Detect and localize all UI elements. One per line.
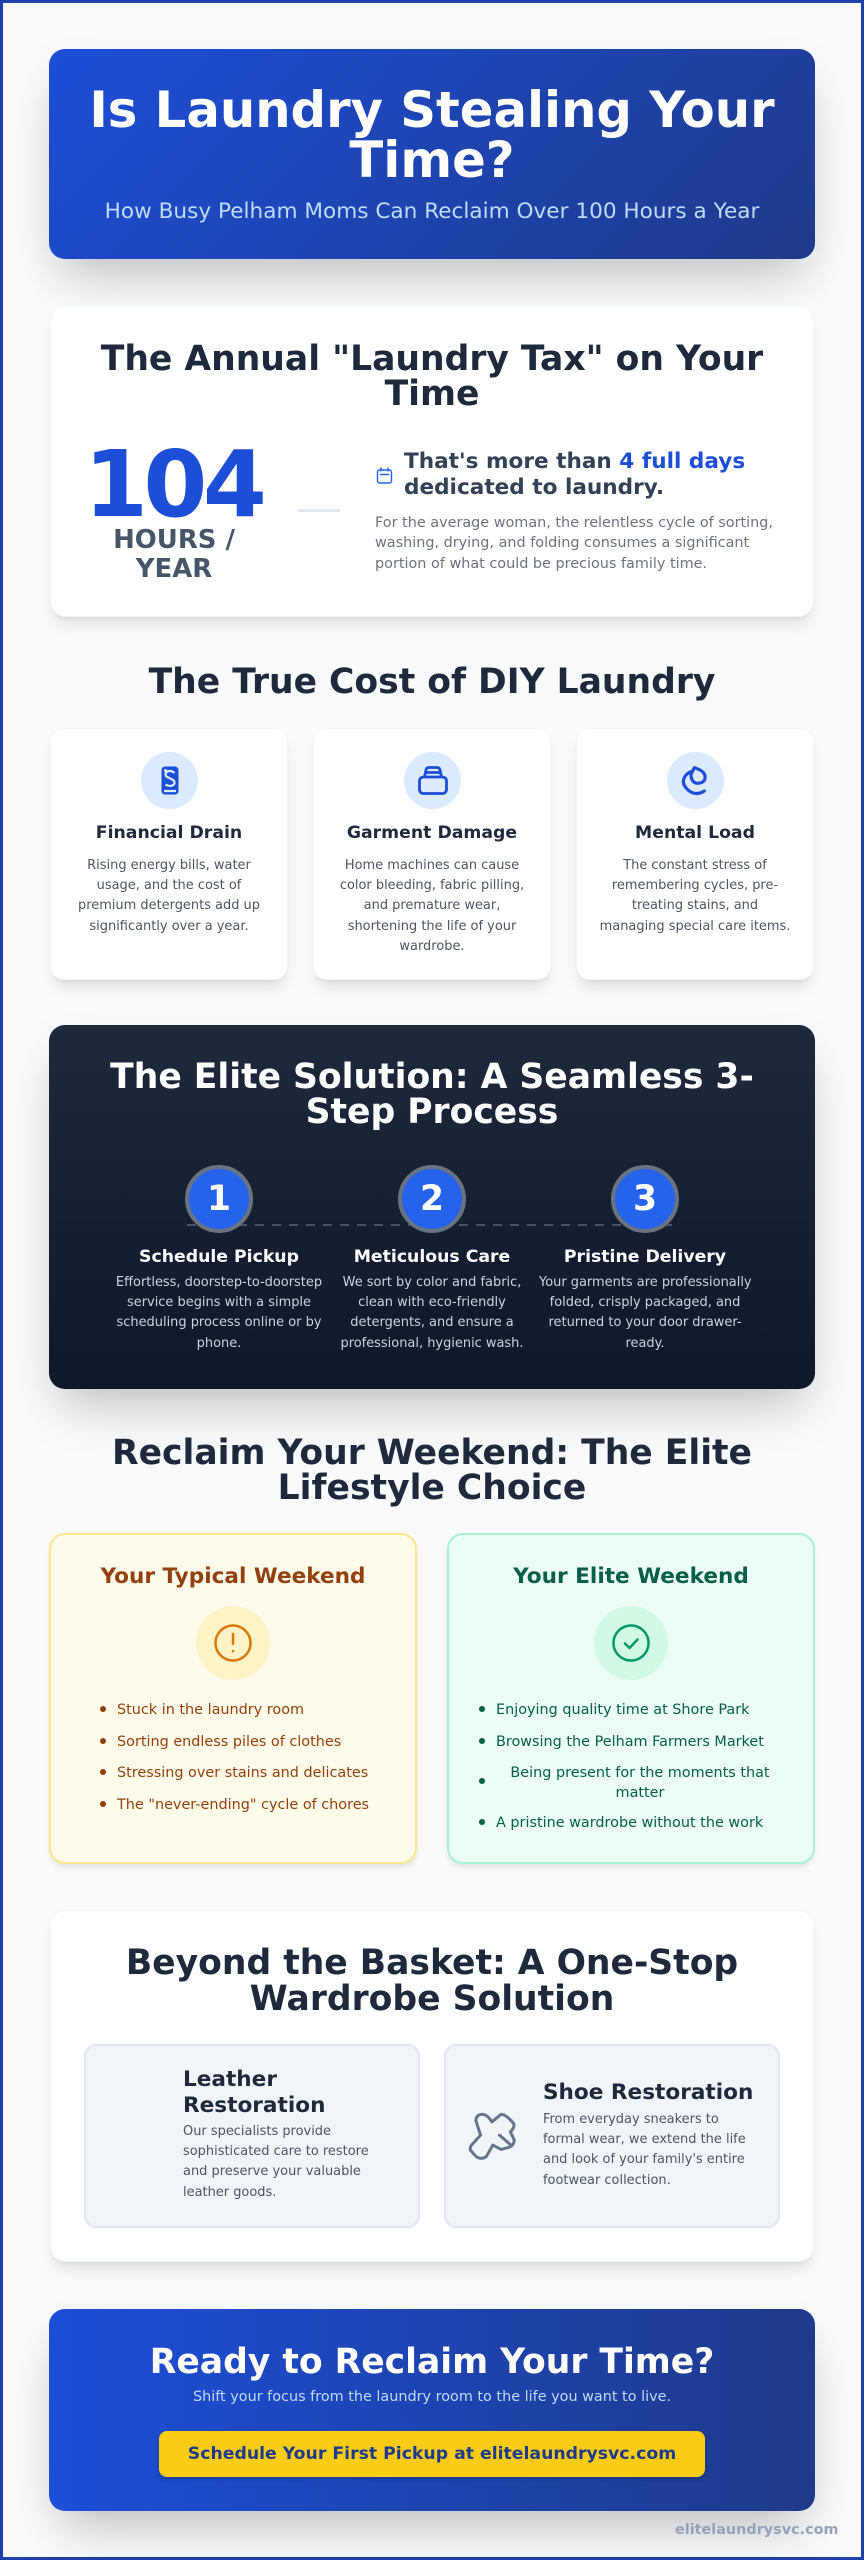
heading: Ready to Reclaim Your Time? [150, 2342, 714, 2382]
heading: The Elite Solution: A Seamless 3- [110, 1057, 754, 1097]
description [375, 515, 773, 572]
title: Is Laundry Stealing Your [89, 81, 775, 139]
step 2 [340, 1165, 524, 1351]
panel: annual laundry tax [50, 306, 814, 617]
callout text: That's more than 4 full days [404, 449, 745, 474]
card text: shortening the life of your [348, 919, 516, 934]
divider [298, 509, 340, 512]
heading: Time [385, 374, 479, 414]
card text: and premature wear, [364, 898, 500, 913]
big stat: 104: 104 [84, 431, 262, 538]
card heading: Financial Drain [96, 823, 242, 843]
bullet list: Stressing over stains and delicates [117, 1765, 368, 1781]
card text: managing special care items. [600, 919, 790, 934]
bullet list [100, 1702, 369, 1813]
panel: call to action [49, 2309, 815, 2511]
service heading: Leather [183, 2067, 277, 2092]
bullet list: A pristine wardrobe without the work [496, 1815, 763, 1831]
description: portion of what could be precious family time. [375, 556, 707, 572]
card text: Rising energy bills, water [87, 858, 251, 873]
card text: color bleeding, fabric pilling, [340, 878, 524, 893]
button [159, 2431, 705, 2477]
icon: calendar [376, 467, 392, 484]
icon: shoe outline [468, 2112, 516, 2160]
card text: premium detergents add up [78, 898, 260, 913]
panel: garment damage [313, 728, 551, 980]
step text [116, 1275, 322, 1351]
callout text: dedicated to laundry. [404, 475, 664, 500]
service text [543, 2112, 746, 2188]
section heading: reclaim your weekend: Lifestyle Choice [278, 1468, 586, 1508]
panel: mental load [576, 728, 814, 980]
service text: and preserve your valuable [183, 2164, 361, 2179]
bullet list: The "never-ending" cycle of chores [117, 1797, 369, 1813]
card text: Home machines can cause [345, 858, 519, 873]
icon: check [594, 1606, 668, 1680]
step title: Meticulous Care [354, 1246, 510, 1266]
card heading: Your Elite Weekend [513, 1564, 749, 1589]
step text: ready. [625, 1336, 665, 1351]
hero header panel [49, 49, 815, 259]
service heading: Shoe Restoration [543, 2080, 753, 2105]
callout text [404, 449, 745, 500]
service text: sophisticated care to restore [183, 2144, 369, 2159]
step 1 [116, 1165, 322, 1351]
panel: beyond the basket [50, 1910, 814, 2262]
step text: returned to your door drawer- [548, 1315, 742, 1330]
description: For the average woman, the relentless cycle of sorting, [375, 515, 773, 531]
step text: detergents, and ensure a [350, 1315, 514, 1330]
step text: scheduling process online or by [116, 1315, 322, 1330]
bullet list [479, 1702, 770, 1831]
step number [611, 1165, 679, 1233]
heading: The Annual "Laundry Tax" on Your [101, 339, 763, 379]
dashed connector [187, 1224, 677, 1226]
title [89, 81, 775, 189]
step number: 2 [420, 1179, 444, 1219]
card text: treating stains, and [632, 898, 758, 913]
service text: From everyday sneakers to [543, 2112, 719, 2127]
heading [100, 339, 764, 414]
card heading: Garment Damage [347, 823, 517, 843]
card text [600, 858, 790, 934]
service text: Our specialists provide [183, 2124, 331, 2139]
icon: warning [196, 1606, 270, 1680]
step text: clean with eco-friendly [358, 1295, 506, 1310]
service text: and look of your family's entire [543, 2152, 745, 2167]
icon: money phone [141, 752, 198, 809]
item [479, 1706, 485, 1712]
title: Time? [349, 131, 515, 189]
bullet list: Stuck in the laundry room [117, 1702, 304, 1718]
step text: folded, crisply packaged, and [550, 1295, 740, 1310]
card text: significantly over a year. [89, 919, 249, 934]
step text [539, 1275, 752, 1351]
service heading [183, 2067, 325, 2118]
section heading: reclaim your weekend [112, 1433, 752, 1508]
service text: footwear collection. [543, 2173, 671, 2188]
subheading: Shift your focus from the laundry room to the life you want to live. [193, 2389, 671, 2405]
service: leather restoration [84, 2044, 420, 2228]
step title: Schedule Pickup [139, 1246, 299, 1266]
heading: Wardrobe Solution [250, 1979, 614, 2019]
description: washing, drying, and folding consumes a significant [375, 535, 749, 551]
heading: Beyond the Basket: A One-Stop [126, 1943, 738, 1983]
service text [183, 2124, 369, 2200]
card text: The constant stress of [623, 858, 767, 873]
step text: service begins with a simple [127, 1295, 311, 1310]
panel: financial drain [50, 728, 288, 980]
stat label: HOURS / [113, 525, 235, 555]
step text: Your garments are professionally [539, 1275, 752, 1290]
step text: phone. [197, 1336, 241, 1351]
bullet list: Enjoying quality time at Shore Park [496, 1702, 749, 1718]
card text: remembering cycles, pre- [612, 878, 778, 893]
stat label: YEAR [136, 554, 212, 584]
heading: Step Process [306, 1092, 558, 1132]
heading [126, 1943, 738, 2019]
card text [78, 858, 260, 934]
section heading: reclaim your weekend: Reclaim Your Weekend: The Elite [112, 1433, 752, 1473]
bullet list: matter [616, 1785, 664, 1801]
step number [398, 1165, 466, 1233]
step number: 3 [633, 1179, 657, 1219]
item [100, 1706, 106, 1712]
step number: 1 [207, 1179, 231, 1219]
bullet list: Being present for the moments that [510, 1765, 770, 1781]
step text: We sort by color and fabric, [343, 1275, 521, 1290]
panel: typical weekend [49, 1533, 417, 1864]
stat label [113, 525, 235, 584]
icon: detergent jar [404, 752, 461, 809]
card text [340, 858, 524, 954]
card heading: Mental Load [635, 823, 755, 843]
service text: formal wear, we extend the life [543, 2132, 746, 2147]
step title: Pristine Delivery [564, 1246, 726, 1266]
service heading: Restoration [183, 2093, 325, 2118]
step text: professional, hygienic wash. [340, 1336, 524, 1351]
subtitle: How Busy Pelham Moms Can Reclaim Over 100 Hours a Year [105, 199, 759, 224]
service: shoe restoration [444, 2044, 780, 2228]
card heading: Your Typical Weekend [100, 1564, 366, 1589]
card text: usage, and the cost of [97, 878, 241, 893]
section heading: true cost: The True Cost of DIY Laundry [149, 662, 715, 702]
heading [110, 1057, 754, 1132]
panel: elite weekend [447, 1533, 815, 1864]
footer url: elitelaundrysvc.com [675, 2522, 839, 2538]
step text: Effortless, doorstep-to-doorstep [116, 1275, 322, 1290]
step number [185, 1165, 253, 1233]
panel: elite solution [49, 1025, 815, 1389]
step text [340, 1275, 524, 1351]
icon: cycle swirl [667, 752, 724, 809]
bullet list: Browsing the Pelham Farmers Market [496, 1734, 764, 1750]
button: Schedule Your First Pickup at elitelaundrysvc.com [188, 2444, 676, 2464]
bullet list: Sorting endless piles of clothes [117, 1734, 341, 1750]
service text: leather goods. [183, 2185, 276, 2200]
step 3 [539, 1165, 752, 1351]
card text: wardrobe. [399, 939, 465, 954]
